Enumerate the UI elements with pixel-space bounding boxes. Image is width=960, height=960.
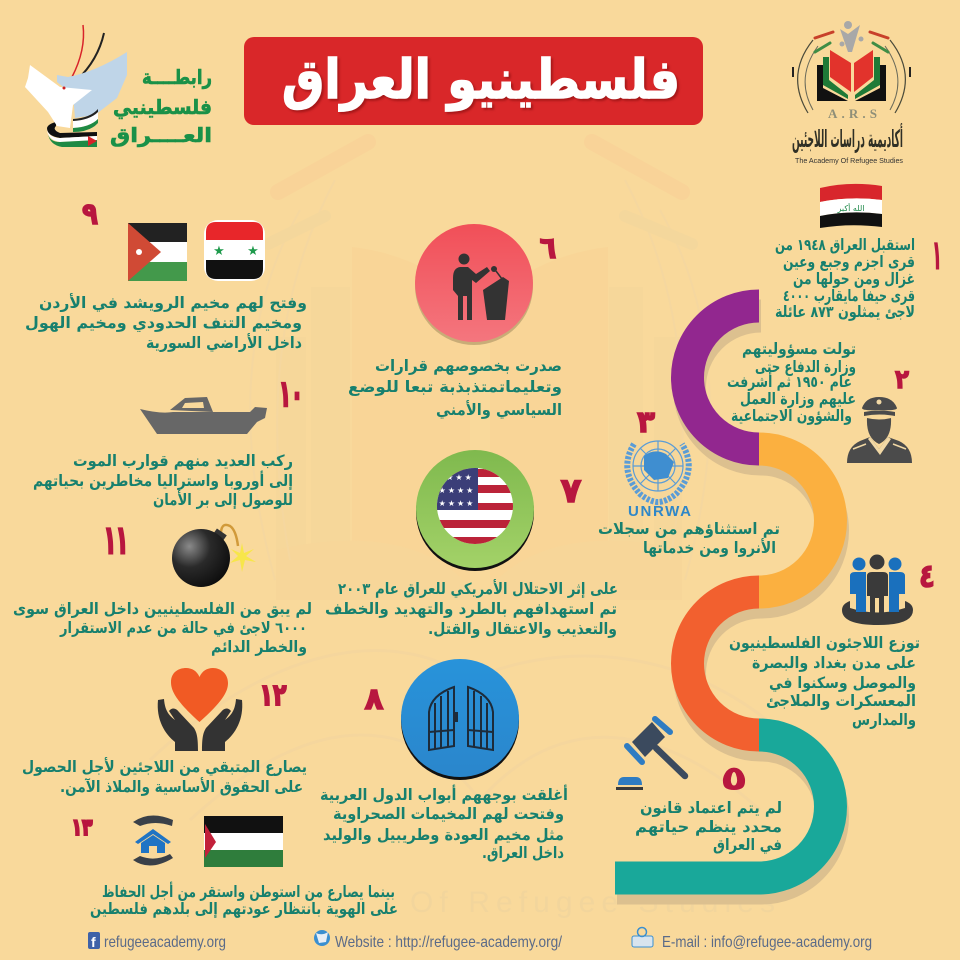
text: step 1: قرى حيفا مايقارب ٤٠٠٠ xyxy=(783,287,915,305)
text: step 12 xyxy=(22,757,307,796)
icon: Syria flag: ★ xyxy=(247,244,259,259)
logo: League of Palestinians of Iraq xyxy=(25,25,212,147)
text: step 6: السياسي والأمني xyxy=(436,400,562,420)
text: step 3: تم استثناؤهم من سجلات xyxy=(598,520,780,538)
text: step 8 xyxy=(320,785,568,862)
text: step 2: والشؤون الاجتماعية xyxy=(731,407,852,425)
text: step 2: وزارة الدفاع حتى xyxy=(755,358,856,376)
number 7: ٧ xyxy=(560,471,582,511)
number 6: ٦ xyxy=(540,231,556,266)
text: step 9: ومخيم التنف الحدودي ومخيم الهول xyxy=(25,314,302,333)
number 2: ٢ xyxy=(895,365,909,395)
step 8: gate circle, number, text xyxy=(320,659,568,862)
footer: contact links xyxy=(88,928,872,951)
text: step 1 xyxy=(775,236,915,321)
icon: bomb xyxy=(172,525,256,587)
text: step 11 xyxy=(13,600,312,656)
title banner xyxy=(244,37,703,125)
step 12: heart in hands, number, text xyxy=(22,668,307,796)
text: step 2: تولت مسؤوليتهم xyxy=(742,340,856,358)
text: step 4 xyxy=(729,634,920,729)
text: step 2 xyxy=(727,340,856,425)
icon: USA flag badge: ★★★★ xyxy=(439,499,475,508)
icon: group of people xyxy=(842,554,913,625)
text: step 1: استقبل العراق ١٩٤٨ من xyxy=(775,236,915,254)
logo: League of Palestinians of Iraq: فلسطينيي xyxy=(113,95,212,120)
text: step 7: تم استهدافهم بالطرد والتهديد والخطف xyxy=(325,600,617,618)
step 4: people, number, text xyxy=(729,554,935,729)
text: step 11: ٦٠٠٠ لاجئ في حالة من عدم الاستقرار xyxy=(59,619,307,638)
website address: Website : http://refugee-academy.org/ xyxy=(335,934,562,951)
icon: soldier xyxy=(847,397,912,463)
icon: Iraq flag: الله أكبر xyxy=(836,203,864,213)
step 7: US flag circle, number, text xyxy=(325,450,618,638)
text: step 4: والمدارس xyxy=(852,711,916,729)
text: step 7: على إثر الاحتلال الأمريكي للعراق عام ٢٠٠٣ xyxy=(338,579,618,599)
logo: League of Palestinians of Iraq: رابطــــة xyxy=(142,65,212,89)
logo: Academy of Refugee Studies xyxy=(792,21,910,165)
text: step 11: لم يبق من الفلسطينيين داخل العراق سوى xyxy=(13,600,312,618)
text: step 7 xyxy=(325,579,618,638)
icon: facebook xyxy=(88,932,100,950)
step 2: soldier, number, text xyxy=(727,340,912,463)
number 10: ١٠ xyxy=(279,374,303,415)
icon: USA flag badge: ★★★ xyxy=(446,473,474,482)
text: ١ xyxy=(933,233,941,277)
step 11: bomb, number, text xyxy=(13,518,312,656)
text: step 2: عام ١٩٥٠ ثم أشرفت xyxy=(727,372,852,391)
text: step 1: لاجئ يمثلون ٨٧٣ عائلة xyxy=(775,303,915,321)
text: step 8: مثل مخيم العودة وطريبيل والوليد xyxy=(323,826,564,844)
text: step 8: وفتحت لهم المخيمات الصحراوية xyxy=(333,805,564,823)
logo: Academy of Refugee Studies: The Academy Of Refugee Studies xyxy=(795,158,904,165)
icon: facebook: f xyxy=(91,934,96,950)
text: step 8: أغلقت بوجههم أبواب الدول العربية xyxy=(320,785,568,804)
text: step 2: عليهم وزارة العمل xyxy=(740,390,856,408)
logo: Academy of Refugee Studies: A.R.S xyxy=(828,106,877,121)
icon: Syria flag: ★ xyxy=(213,244,225,259)
number 4: ٤ xyxy=(919,557,935,595)
icon: globe xyxy=(314,930,330,946)
text: step 6: وتعليماتمتذبذبة تبعا للوضع xyxy=(348,378,562,396)
watermark: faded academy logo: Of Refugee Studies xyxy=(410,886,775,919)
icon: Jordan flag xyxy=(128,223,187,281)
number 12: ١٢ xyxy=(260,678,286,713)
icon: speaker at podium xyxy=(415,224,533,345)
number 11: ١١ xyxy=(104,518,128,562)
text: step 6: صدرت بخصوصهم قرارات xyxy=(375,357,562,375)
text: step 5 xyxy=(635,799,782,855)
number 13: ١٣ xyxy=(72,815,92,841)
number 3: ٣ xyxy=(637,405,655,440)
text: step 9: داخل الأراضي السورية xyxy=(146,333,302,353)
step 5: gavel, number, text xyxy=(616,719,782,855)
icon: email xyxy=(632,928,653,947)
step 6: speaker circle, number, text xyxy=(348,224,562,420)
icon: gavel xyxy=(616,719,685,790)
text: step 9: وفتح لهم مخيم الرويشد في الأردن xyxy=(39,293,307,313)
facebook address: refugeeacademy.org xyxy=(104,934,226,951)
text: step 7: والتعذيب والاعتقال والقتل. xyxy=(428,620,617,638)
text: step 4: والموصل وسكنوا في xyxy=(769,674,916,693)
text: step 8: داخل العراق. xyxy=(482,844,564,862)
text: step 4: توزع اللاجئون الفلسطينيون xyxy=(729,634,920,652)
number 9: ٩ xyxy=(82,197,98,232)
watermark: faded academy logo xyxy=(150,142,810,919)
text: step 13: بينما يصارع من استوطن واستقر من أجل الحفاظ xyxy=(102,882,395,901)
title banner: فلسطينيو العراق xyxy=(282,48,680,111)
text: step 5: لم يتم اعتماد قانون xyxy=(640,799,782,817)
text: step 1: غزال ومن حولها من xyxy=(793,270,915,288)
text: step 12: يصارع المتبقي من اللاجئين لأجل الحصول xyxy=(22,757,307,777)
text: step 1: قرى اجزم وجبع وعين xyxy=(783,253,915,271)
icon: UN emblem xyxy=(627,441,689,502)
icon: house in hands xyxy=(133,815,173,866)
text: step 6 xyxy=(348,357,562,420)
icon: gate xyxy=(401,659,519,780)
number 8: ٨ xyxy=(364,682,384,717)
text: step 13: على الهوية بانتظار عودتهم إلى بلدهم فلسطين xyxy=(90,900,398,918)
icon: Palestine flag xyxy=(204,816,283,867)
email address: E-mail : info@refugee-academy.org xyxy=(662,934,872,951)
text: step 4: المعسكرات والملاجئ xyxy=(766,692,916,710)
icon: boat xyxy=(140,397,267,434)
text: step 4: على مدن بغداد والبصرة xyxy=(752,654,916,672)
logo: League of Palestinians of Iraq: العــــراق xyxy=(110,123,212,147)
icon: heart and hands xyxy=(158,668,242,751)
step 10: boat, number, text xyxy=(33,374,303,509)
text: step 3 xyxy=(598,520,780,557)
number 5: ٥ xyxy=(720,759,748,799)
text: step 5: في العراق xyxy=(713,836,782,855)
icon: USA flag badge: ★★★★ xyxy=(439,486,475,495)
text: step 10: للوصول إلى بر الأمان xyxy=(153,490,293,509)
text: step 10: ركب العديد منهم قوارب الموت xyxy=(73,452,293,470)
serpentine timeline path xyxy=(615,306,832,888)
UNRWA wordmark: UNRWA xyxy=(628,503,691,520)
text: step 3: الأنروا ومن خدماتها xyxy=(643,538,776,557)
text: step 10 xyxy=(33,452,293,509)
text: step 9 xyxy=(25,293,307,353)
text: step 12: على الحقوق الأساسية والملاذ الآمن. xyxy=(60,777,303,796)
text: step 11: والخطر الدائم xyxy=(211,638,307,656)
icon: Iraq flag xyxy=(820,184,882,228)
icon: USA flag badge xyxy=(416,450,534,571)
step 3: UNRWA logo, number, text xyxy=(598,405,780,557)
text: step 10: إلى أوروبا واستراليا مخاطرين بحياتهم xyxy=(33,471,293,490)
text: step 13 xyxy=(90,882,398,918)
step 9: flags, number, text xyxy=(25,197,307,353)
text: step 5: محدد ينظم حياتهم xyxy=(635,818,782,836)
step 1: Iraq flag, number, text xyxy=(775,184,941,321)
icon: Syria flag xyxy=(204,220,265,281)
step 13: icons, number, text xyxy=(72,815,398,918)
